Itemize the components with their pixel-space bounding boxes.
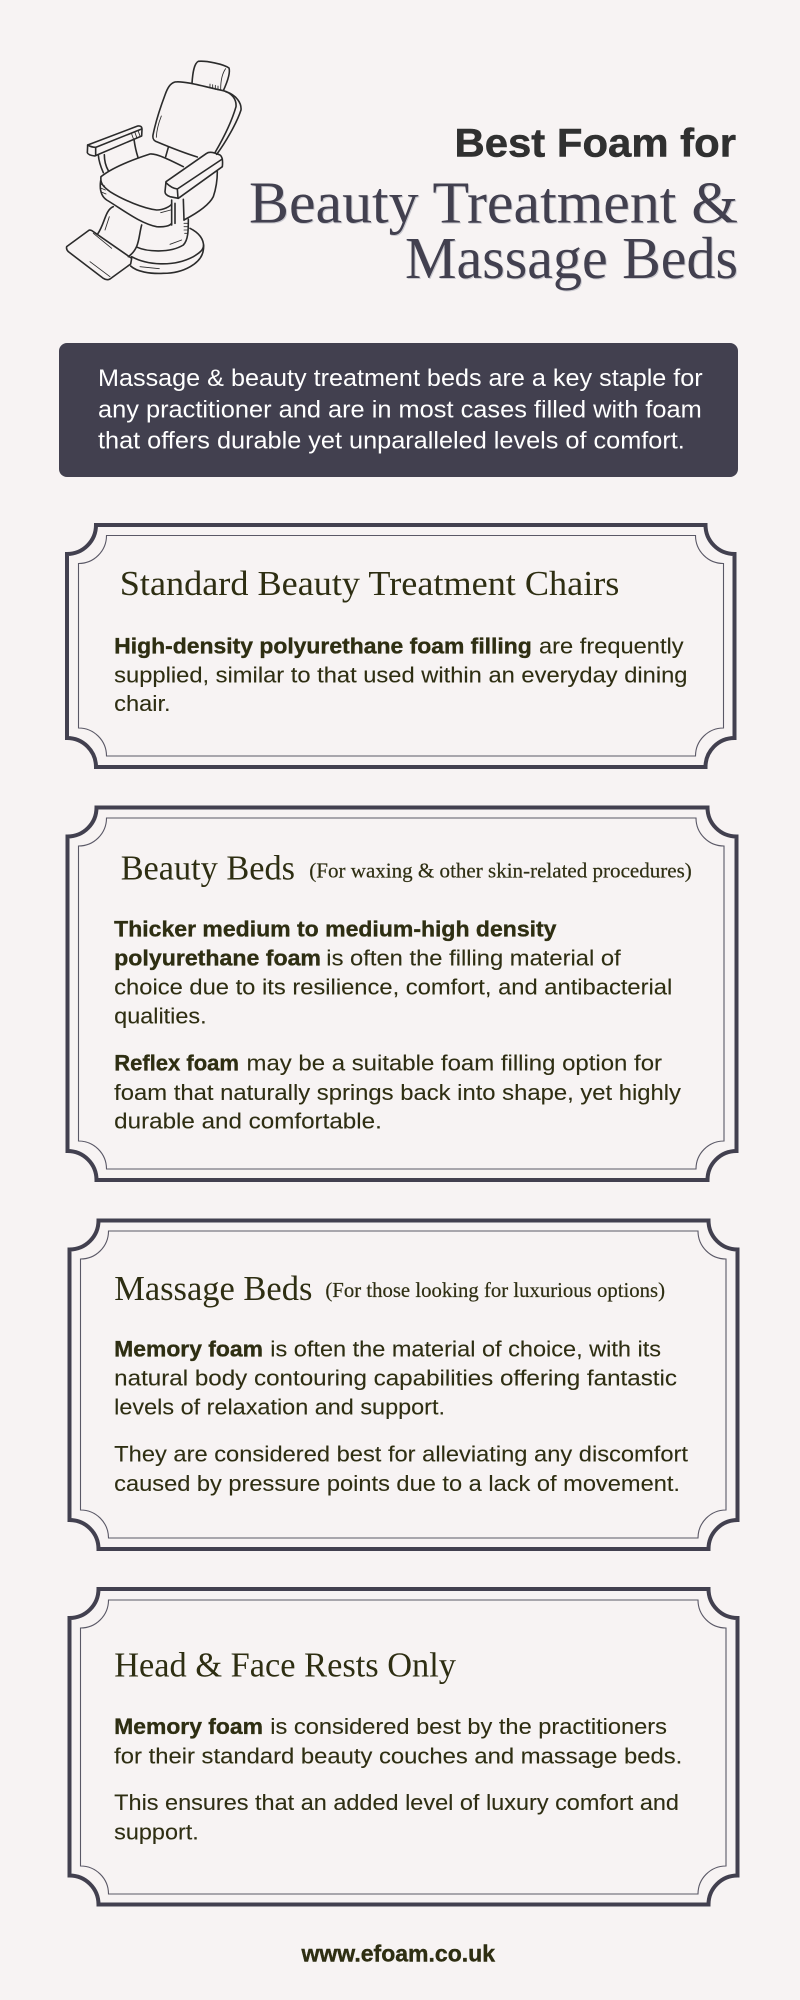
text block: medium density foam <box>114 917 672 1028</box>
text block: pressure points <box>114 1442 689 1496</box>
heading: Standard Beauty Treatment Chairs <box>120 564 619 603</box>
text block: pressure points: caused by pressure points due to a lack of movement. <box>114 1471 680 1496</box>
panel: massage beds <box>70 1220 738 1549</box>
text block: memory foam: Memory foam <box>114 1337 263 1362</box>
icon: beauty treatment chair <box>67 61 241 280</box>
text block: memory foam: natural body contouring capabilities offering fantastic <box>114 1366 677 1391</box>
text block: are frequently <box>539 633 684 658</box>
text block: reflex foam: may be a suitable foam filling option for <box>246 1051 663 1076</box>
panel: introduction <box>59 343 738 477</box>
text block: reflex foam: Reflex foam <box>114 1051 239 1076</box>
panel: beauty beds <box>68 808 736 1180</box>
text block: High-density polyurethane foam filling <box>114 633 532 658</box>
title: beauty treatment and massage beds <box>249 170 738 291</box>
title: beauty treatment and massage beds: Beauty Treatment & <box>249 170 738 236</box>
panel: introduction: that offers durable yet unparalleled levels of comfort. <box>98 427 685 454</box>
subheading: (For those looking for luxurious options) <box>325 1278 665 1302</box>
title: beauty treatment and massage beds: Massage Beds <box>405 225 738 291</box>
panel: introduction: any practitioner and are in most cases filled with foam <box>98 396 702 423</box>
text block: memory foam: is often the material of choice, with its <box>270 1337 661 1362</box>
text block: memory foam: is considered best by the practitioners <box>270 1714 667 1739</box>
footer: website: www.efoam.co.uk <box>300 1941 495 1967</box>
text block: reflex foam: foam that naturally springs back into shape, yet highly <box>114 1080 682 1105</box>
text block: memory foam: Memory foam <box>114 1714 263 1739</box>
subheading: (For waxing & other skin-related procedures) <box>309 859 692 883</box>
text block: luxury comfort: This ensures that an added level of luxury comfort and <box>114 1790 679 1815</box>
text block: medium density foam: qualities. <box>114 1003 207 1028</box>
text block: supplied, similar to that used within an everyday dining <box>114 662 687 687</box>
text block: memory foam: levels of relaxation and support. <box>114 1395 445 1420</box>
heading: Beauty Beds <box>121 848 295 887</box>
panel: head and face rests only <box>70 1589 738 1904</box>
text block <box>114 633 687 716</box>
panel: standard beauty treatment chairs <box>67 525 734 767</box>
panel: introduction: Massage & beauty treatment beds are a key staple for <box>98 365 703 392</box>
text block: luxury comfort: support. <box>114 1819 199 1844</box>
text block: reflex foam: durable and comfortable. <box>114 1109 382 1134</box>
text block: memory foam <box>114 1337 677 1420</box>
text block: luxury comfort <box>114 1790 679 1844</box>
text block: pressure points: They are considered best for alleviating any discomfort <box>114 1442 689 1467</box>
text block: memory foam <box>114 1714 682 1768</box>
heading: Massage Beds <box>114 1269 312 1308</box>
text block: memory foam: for their standard beauty couches and massage beds. <box>114 1743 682 1768</box>
heading: best foam for: Best Foam for <box>454 122 736 166</box>
text block: medium density foam: polyurethane foam <box>114 946 321 971</box>
heading: Head & Face Rests Only <box>114 1646 456 1685</box>
text block: chair. <box>114 691 171 716</box>
text block: medium density foam: Thicker medium to medium-high density <box>114 917 557 942</box>
text block: reflex foam <box>114 1051 682 1134</box>
text block: medium density foam: choice due to its resilience, comfort, and antibacterial <box>114 975 672 1000</box>
text block: medium density foam: is often the filling material of <box>326 946 621 971</box>
